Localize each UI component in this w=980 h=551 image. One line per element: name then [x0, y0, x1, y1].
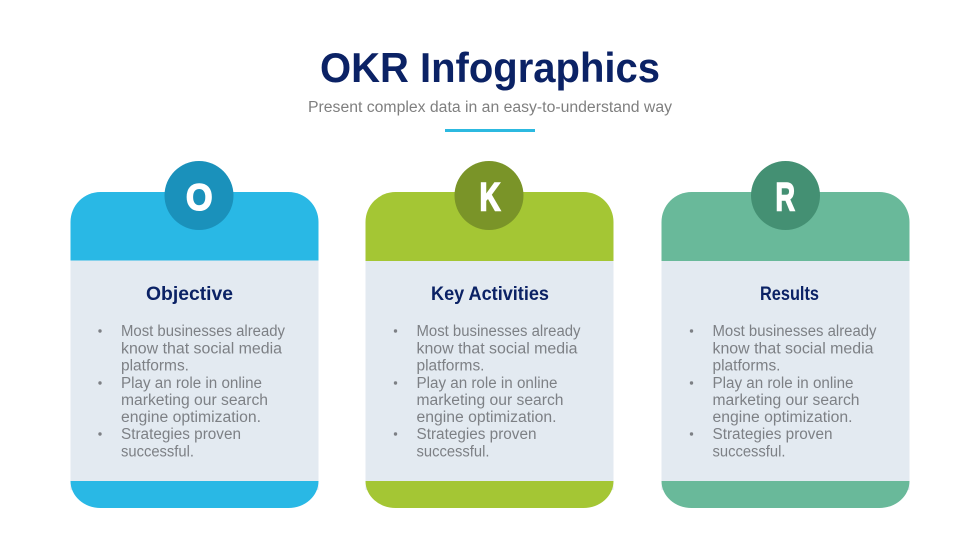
bullet list: engine optimization. [416, 409, 556, 426]
bullet list: Strategies proven [712, 426, 832, 443]
panel: results [662, 161, 910, 508]
bullet list: platforms. [712, 358, 780, 374]
bullet list: Strategies proven [416, 426, 536, 443]
heading: key activities: Key Activities [431, 284, 549, 305]
panel body [662, 240, 910, 490]
panel: objective [70, 161, 318, 508]
bullet list: platforms. [121, 358, 189, 374]
icon: letter badge K [454, 161, 524, 230]
bullet list: engine optimization. [121, 409, 261, 426]
title underline [445, 129, 535, 132]
bullet list: Play an role in online [121, 375, 262, 392]
icon: letter badge K: K [480, 176, 501, 220]
footer band [70, 481, 318, 508]
bullet list: marketing our search [121, 392, 268, 409]
icon: letter badge R [751, 161, 820, 230]
bullet list: platforms. [416, 358, 484, 374]
panel: key activities [366, 161, 614, 508]
footer band [366, 481, 614, 508]
subtitle: Present complex data in an easy-to-understand way [308, 99, 672, 116]
bullet list: Strategies proven [121, 426, 241, 443]
bullet list: know that social media [416, 340, 578, 358]
bullet list: successful. [416, 444, 490, 460]
bullet list: marketing our search [416, 392, 564, 409]
bullet list [690, 323, 877, 460]
header band [366, 192, 614, 261]
icon: letter badge O: O [186, 177, 212, 218]
panel body [366, 240, 614, 490]
heading: objective: Objective [146, 284, 233, 305]
title: OKR Infographics [320, 44, 660, 91]
bullet list: Most businesses already [121, 323, 285, 340]
bullet list: Most businesses already [416, 323, 581, 340]
bullet list: Most businesses already [712, 323, 877, 340]
heading: results: Results [760, 284, 819, 305]
bullet list: engine optimization. [712, 409, 852, 426]
bullet list: successful. [121, 444, 194, 460]
icon: letter badge O [164, 161, 234, 230]
bullet list [98, 323, 285, 460]
header band [662, 192, 910, 261]
panel body [70, 240, 318, 490]
icon: letter badge R: R [776, 176, 795, 220]
bullet list: Play an role in online [416, 375, 558, 392]
bullet list: know that social media [712, 340, 874, 358]
bullet list: Play an role in online [712, 375, 854, 392]
bullet list: marketing our search [712, 392, 860, 409]
bullet list: successful. [712, 444, 786, 460]
bullet list [394, 323, 581, 460]
header band [70, 192, 318, 260]
bullet list: know that social media [121, 340, 282, 358]
footer band [662, 481, 910, 508]
